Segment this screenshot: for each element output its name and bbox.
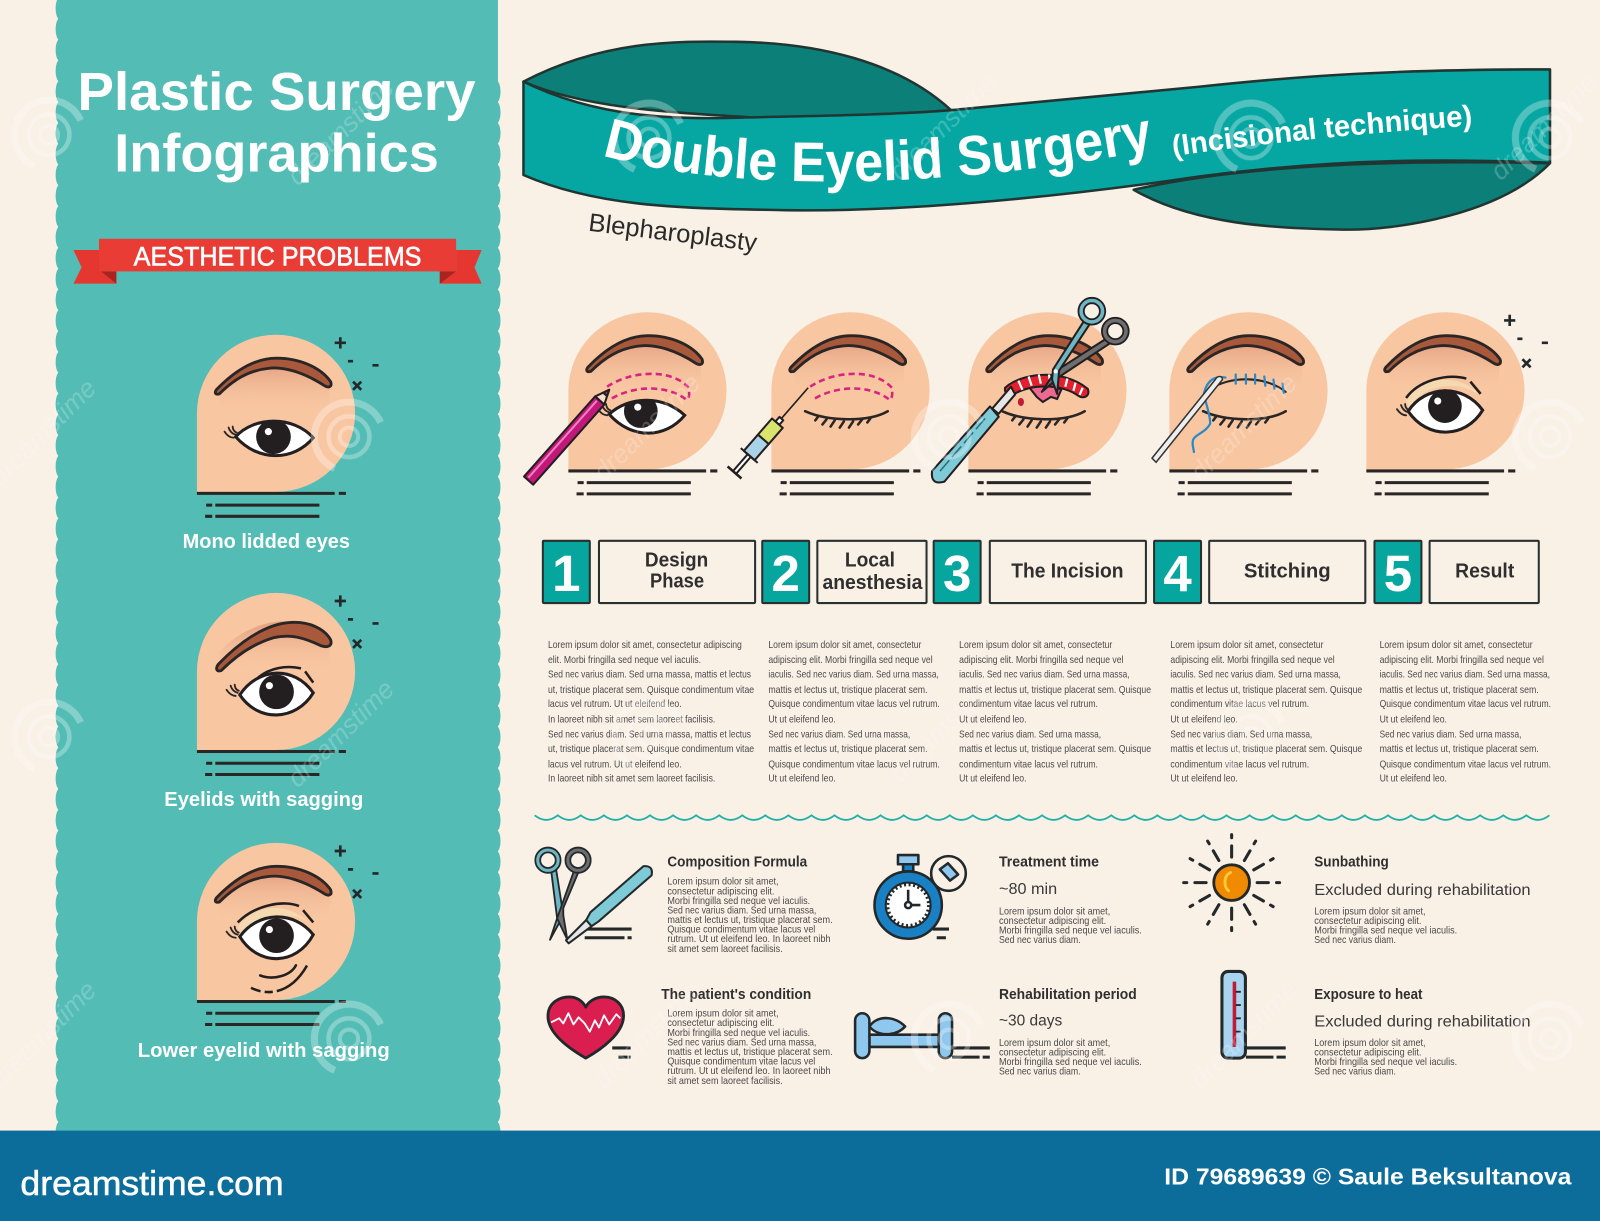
text column 2: Lorem ipsum dolor sit amet, consectetur bbox=[768, 640, 922, 651]
text column 2: Ut ut eleifend leo. bbox=[768, 774, 836, 785]
step 1 illustration: design phase bbox=[524, 312, 727, 494]
value: heat excluded: Excluded during rehabilitation bbox=[1314, 1014, 1531, 1031]
step headers: 3 bbox=[943, 545, 971, 602]
step headers: Result bbox=[1455, 561, 1514, 583]
text column 2: Quisque condimentum vitae lacus vel rutrum. bbox=[768, 759, 940, 770]
step headers: 1 bbox=[552, 545, 581, 602]
text: composition formula: Morbi fringilla sed neque vel iaculis. bbox=[667, 896, 810, 907]
text column 4: condimentum vitae lacus vel rutrum. bbox=[1170, 759, 1309, 770]
text column 4 bbox=[1170, 640, 1363, 785]
watermark text: dreamstime bbox=[1184, 368, 1303, 487]
value: 30 days: ~30 days bbox=[999, 1012, 1062, 1029]
text: composition formula bbox=[667, 877, 833, 955]
icon: scissors and scalpel bbox=[538, 850, 655, 946]
text: composition formula: rutrum. Ut ut eleifend leo. In laoreet nibh bbox=[667, 934, 831, 945]
icon: heart bbox=[548, 997, 631, 1058]
text: rehabilitation period: Lorem ipsum dolor sit amet, bbox=[999, 1038, 1110, 1049]
text: patient condition: Morbi fringilla sed neque vel iaculis. bbox=[667, 1028, 810, 1039]
text column 2: mattis et lectus ut, tristique placerat sem. bbox=[768, 744, 928, 755]
text column 2: iaculis. Sed nec varius diam. Sed urna massa, bbox=[768, 670, 939, 681]
text column 4: adipiscing elit. Morbi fringilla sed neque vel bbox=[1170, 655, 1335, 666]
text: sunbathing: Lorem ipsum dolor sit amet, bbox=[1314, 906, 1426, 917]
text column 3: Ut ut eleifend leo. bbox=[959, 774, 1027, 785]
text: exposure to heat: Morbi fringilla sed neque vel iaculis. bbox=[1314, 1057, 1457, 1068]
text: treatment time: Lorem ipsum dolor sit amet, bbox=[999, 906, 1110, 917]
text column 3: condimentum vitae lacus vel rutrum. bbox=[959, 759, 1098, 770]
ribbon front bbox=[523, 69, 1550, 210]
footer bar bbox=[0, 1131, 1600, 1221]
text: sunbathing bbox=[1314, 906, 1457, 946]
text column 4: mattis et lectus ut, tristique placerat sem. Quisque bbox=[1170, 744, 1363, 755]
watermark text: dreamstime bbox=[1184, 975, 1303, 1094]
text column 5: mattis et lectus ut, tristique placerat sem. bbox=[1380, 685, 1539, 696]
icon: syringe bbox=[726, 380, 817, 480]
text column 1: lacus vel rutrum. Ut ut eleifend leo. bbox=[548, 699, 682, 710]
text: composition formula: Lorem ipsum dolor sit amet, bbox=[667, 877, 779, 888]
value: sunbathing excluded: Excluded during rehabilitation bbox=[1314, 882, 1531, 899]
text: patient condition: Sed nec varius diam. Sed urna massa, bbox=[667, 1037, 816, 1048]
text column 5: adipiscing elit. Morbi fringilla sed neque vel bbox=[1380, 655, 1544, 666]
text: composition formula: consectetur adipiscing elit. bbox=[667, 886, 774, 897]
text column 1: In laoreet nibh sit amet sem laoreet facilisis. bbox=[548, 714, 715, 725]
panel title bbox=[78, 62, 476, 183]
text: treatment time: consectetur adipiscing elit. bbox=[999, 916, 1106, 927]
step headers: 4 bbox=[1163, 545, 1192, 602]
step headers: 5 bbox=[1384, 545, 1412, 602]
panel right scallops bbox=[497, 81, 501, 1221]
text: rehabilitation period: Morbi fringilla sed neque vel iaculis. bbox=[999, 1057, 1142, 1068]
heading: treatment time: Treatment time bbox=[999, 854, 1099, 870]
text: composition formula: Quisque condimentum vitae lacus vel bbox=[667, 925, 815, 936]
step headers: anesthesia bbox=[822, 572, 923, 594]
text: exposure to heat bbox=[1314, 1038, 1457, 1078]
label: eyelids with sagging: Eyelids with sagging bbox=[164, 789, 363, 811]
ribbon back fold: bottom bbox=[1134, 162, 1550, 230]
watermark text: dreamstime bbox=[883, 669, 1002, 788]
panel: aesthetic problems bbox=[56, 0, 501, 1221]
ribbon back fold: top bbox=[523, 42, 951, 120]
text column 5: iaculis. Sed nec varius diam. Sed urna massa, bbox=[1380, 670, 1550, 681]
text column 1: ut, tristique placerat sem. Quisque condimentum vitae bbox=[548, 744, 754, 755]
text column 4: Ut ut eleifend leo. bbox=[1170, 774, 1238, 785]
step headers: 2 bbox=[772, 545, 800, 602]
icon: needle bbox=[1152, 377, 1222, 462]
watermark text: dreamstime bbox=[281, 72, 400, 191]
text column 3 bbox=[959, 640, 1151, 785]
text column 2: Quisque condimentum vitae lacus vel rutrum. bbox=[768, 699, 940, 710]
text column 4: Sed nec varius diam. Sed urna massa, bbox=[1170, 730, 1312, 741]
text column 5 bbox=[1380, 640, 1551, 785]
text column 5: Sed nec varius diam. Sed urna massa, bbox=[1380, 730, 1521, 741]
heading: rehabilitation period: Rehabilitation period bbox=[999, 987, 1137, 1003]
panel title: Plastic Surgery bbox=[78, 62, 476, 122]
step 5 illustration: result bbox=[1366, 312, 1548, 494]
text column 2: adipiscing elit. Morbi fringilla sed neque vel bbox=[768, 655, 933, 666]
panel left scallops bbox=[56, 0, 59, 1164]
text column 3: Ut ut eleifend leo. bbox=[959, 714, 1027, 725]
watermark text: dreamstime bbox=[281, 674, 400, 793]
text column 3: condimentum vitae lacus vel rutrum. bbox=[959, 699, 1098, 710]
icon: stopwatch bbox=[874, 855, 966, 939]
text column 1: Sed nec varius diam. Sed urna massa, mattis et lectus bbox=[548, 730, 751, 741]
red ribbon heading: AESTHETIC PROBLEMS bbox=[134, 241, 421, 271]
ribbon title: Double Eyelid Surgery bbox=[605, 118, 1148, 194]
text column 4: iaculis. Sed nec varius diam. Sed urna massa, bbox=[1170, 670, 1341, 681]
text column 5: Quisque condimentum vitae lacus vel rutrum. bbox=[1380, 699, 1551, 710]
watermark text: dreamstime bbox=[587, 975, 706, 1094]
text: exposure to heat: Sed nec varius diam. bbox=[1314, 1067, 1396, 1078]
footer credit: ID 79689639 © Saule Beksultanova bbox=[1164, 1164, 1572, 1190]
text column 1: ut, tristique placerat sem. Quisque condimentum vitae bbox=[548, 685, 754, 696]
incision wound bbox=[1005, 374, 1088, 406]
text column 1: Sed nec varius diam. Sed urna massa, mattis et lectus bbox=[548, 670, 751, 681]
red ribbon heading bbox=[73, 239, 482, 284]
heading: composition formula: Composition Formula bbox=[667, 854, 808, 870]
footer brand: dreamstime.com bbox=[20, 1165, 284, 1203]
stitched incision bbox=[1193, 374, 1286, 452]
step headers bbox=[543, 541, 1539, 603]
watermark swirls bbox=[14, 100, 1582, 1070]
label: lower eyelid with sagging: Lower eyelid with sagging bbox=[138, 1040, 390, 1062]
step 2 illustration: local anesthesia bbox=[726, 312, 930, 494]
icon: bed bbox=[855, 1013, 990, 1058]
icon: scalpel bbox=[928, 383, 1019, 486]
text: exposure to heat: Lorem ipsum dolor sit amet, bbox=[1314, 1038, 1426, 1049]
text column 1: In laoreet nibh sit amet sem laoreet facilisis. bbox=[548, 774, 715, 785]
text column 4: Lorem ipsum dolor sit amet, consectetur bbox=[1170, 640, 1324, 651]
text: treatment time bbox=[999, 906, 1142, 946]
watermark text: dreamstime bbox=[883, 67, 1002, 186]
text: composition formula: Sed nec varius diam. Sed urna massa, bbox=[667, 905, 816, 916]
icon: sun bbox=[1184, 835, 1280, 931]
text column 2: Sed nec varius diam. Sed urna massa, bbox=[768, 730, 910, 741]
icon: scissors bbox=[1042, 301, 1126, 394]
heading: exposure to heat: Exposure to heat bbox=[1314, 987, 1423, 1003]
text column 5: Ut ut eleifend leo. bbox=[1380, 714, 1447, 725]
text: treatment time: Sed nec varius diam. bbox=[999, 935, 1081, 946]
text: composition formula: sit amet sem laoreet facilisis. bbox=[667, 944, 783, 955]
text column 3: mattis et lectus ut, tristique placerat sem. Quisque bbox=[959, 744, 1151, 755]
panel body bbox=[58, 0, 498, 1133]
text: composition formula: mattis et lectus ut, tristique placerat sem. bbox=[667, 915, 833, 926]
text column 4: Ut ut eleifend leo. bbox=[1170, 714, 1238, 725]
text: exposure to heat: consectetur adipiscing elit. bbox=[1314, 1047, 1421, 1058]
text column 2: mattis et lectus ut, tristique placerat sem. bbox=[768, 685, 928, 696]
watermark text: dreamstime bbox=[587, 368, 706, 487]
eye: mono lidded bbox=[197, 335, 379, 516]
text: sunbathing: Morbi fringilla sed neque vel iaculis. bbox=[1314, 925, 1457, 936]
text: patient condition: Lorem ipsum dolor sit amet, bbox=[667, 1009, 779, 1020]
text column 4: condimentum vitae lacus vel rutrum. bbox=[1170, 699, 1309, 710]
icon: thermometer bbox=[1222, 971, 1286, 1058]
step headers: The Incision bbox=[1011, 561, 1123, 583]
text column 3: mattis et lectus ut, tristique placerat sem. Quisque bbox=[959, 685, 1151, 696]
step 4 illustration: stitching bbox=[1152, 312, 1328, 494]
step 3 illustration: the incision bbox=[928, 301, 1127, 494]
text column 1: lacus vel rutrum. Ut ut eleifend leo. bbox=[548, 759, 682, 770]
step headers: Phase bbox=[650, 571, 704, 593]
text column 3: Lorem ipsum dolor sit amet, consectetur bbox=[959, 640, 1113, 651]
text column 5: Quisque condimentum vitae lacus vel rutrum. bbox=[1380, 759, 1551, 770]
step headers: Stitching bbox=[1244, 561, 1331, 583]
main title ribbon bbox=[523, 42, 1550, 230]
text: rehabilitation period bbox=[999, 1038, 1142, 1078]
panel title: Infographics bbox=[114, 123, 439, 183]
text column 1: Lorem ipsum dolor sit amet, consectetur adipiscing bbox=[548, 640, 742, 651]
subtitle: Blepharoplasty: Blepharoplasty bbox=[587, 209, 759, 257]
text: patient condition: mattis et lectus ut, tristique placerat sem. bbox=[667, 1047, 833, 1058]
text: rehabilitation period: consectetur adipiscing elit. bbox=[999, 1047, 1106, 1058]
label: mono lidded: Mono lidded eyes bbox=[183, 531, 350, 553]
text: treatment time: Morbi fringilla sed neque vel iaculis. bbox=[999, 925, 1142, 936]
text column 3: adipiscing elit. Morbi fringilla sed neque vel bbox=[959, 655, 1123, 666]
text column 4: mattis et lectus ut, tristique placerat sem. Quisque bbox=[1170, 685, 1363, 696]
eye: lower eyelid with sagging bbox=[197, 843, 379, 1024]
text column 1: elit. Morbi fringilla sed neque vel iaculis. bbox=[548, 655, 701, 666]
eye: eyelids with sagging bbox=[197, 593, 379, 774]
heading: patient condition: The patient's condition bbox=[661, 987, 811, 1003]
text column 2 bbox=[768, 640, 940, 785]
text: sunbathing: Sed nec varius diam. bbox=[1314, 935, 1396, 946]
text: patient condition: Quisque condimentum vitae lacus vel bbox=[667, 1057, 815, 1068]
ribbon subtitle: (Incisional technique) bbox=[1173, 104, 1471, 162]
step headers: Local bbox=[845, 549, 895, 571]
text: patient condition: consectetur adipiscing elit. bbox=[667, 1018, 774, 1029]
step headers: Design bbox=[645, 549, 708, 571]
text column 3: iaculis. Sed nec varius diam. Sed urna massa, bbox=[959, 670, 1130, 681]
heading: sunbathing: Sunbathing bbox=[1314, 854, 1389, 870]
value: 80 min: ~80 min bbox=[999, 881, 1057, 898]
text column 5: Ut ut eleifend leo. bbox=[1380, 774, 1447, 785]
text column 3: Sed nec varius diam. Sed urna massa, bbox=[959, 730, 1101, 741]
text: rehabilitation period: Sed nec varius diam. bbox=[999, 1067, 1081, 1078]
watermark text: dreamstime bbox=[1484, 67, 1600, 186]
text: patient condition: sit amet sem laoreet facilisis. bbox=[667, 1076, 783, 1087]
text column 2: Ut ut eleifend leo. bbox=[768, 714, 836, 725]
text: patient condition: rutrum. Ut ut eleifend leo. In laoreet nibh bbox=[667, 1066, 831, 1077]
text: patient condition bbox=[667, 1009, 833, 1087]
text: sunbathing: consectetur adipiscing elit. bbox=[1314, 916, 1421, 927]
text column 5: mattis et lectus ut, tristique placerat sem. bbox=[1380, 744, 1539, 755]
text column 1 bbox=[548, 640, 754, 785]
text column 5: Lorem ipsum dolor sit amet, consectetur bbox=[1380, 640, 1533, 651]
icon: pencil bbox=[524, 386, 614, 485]
